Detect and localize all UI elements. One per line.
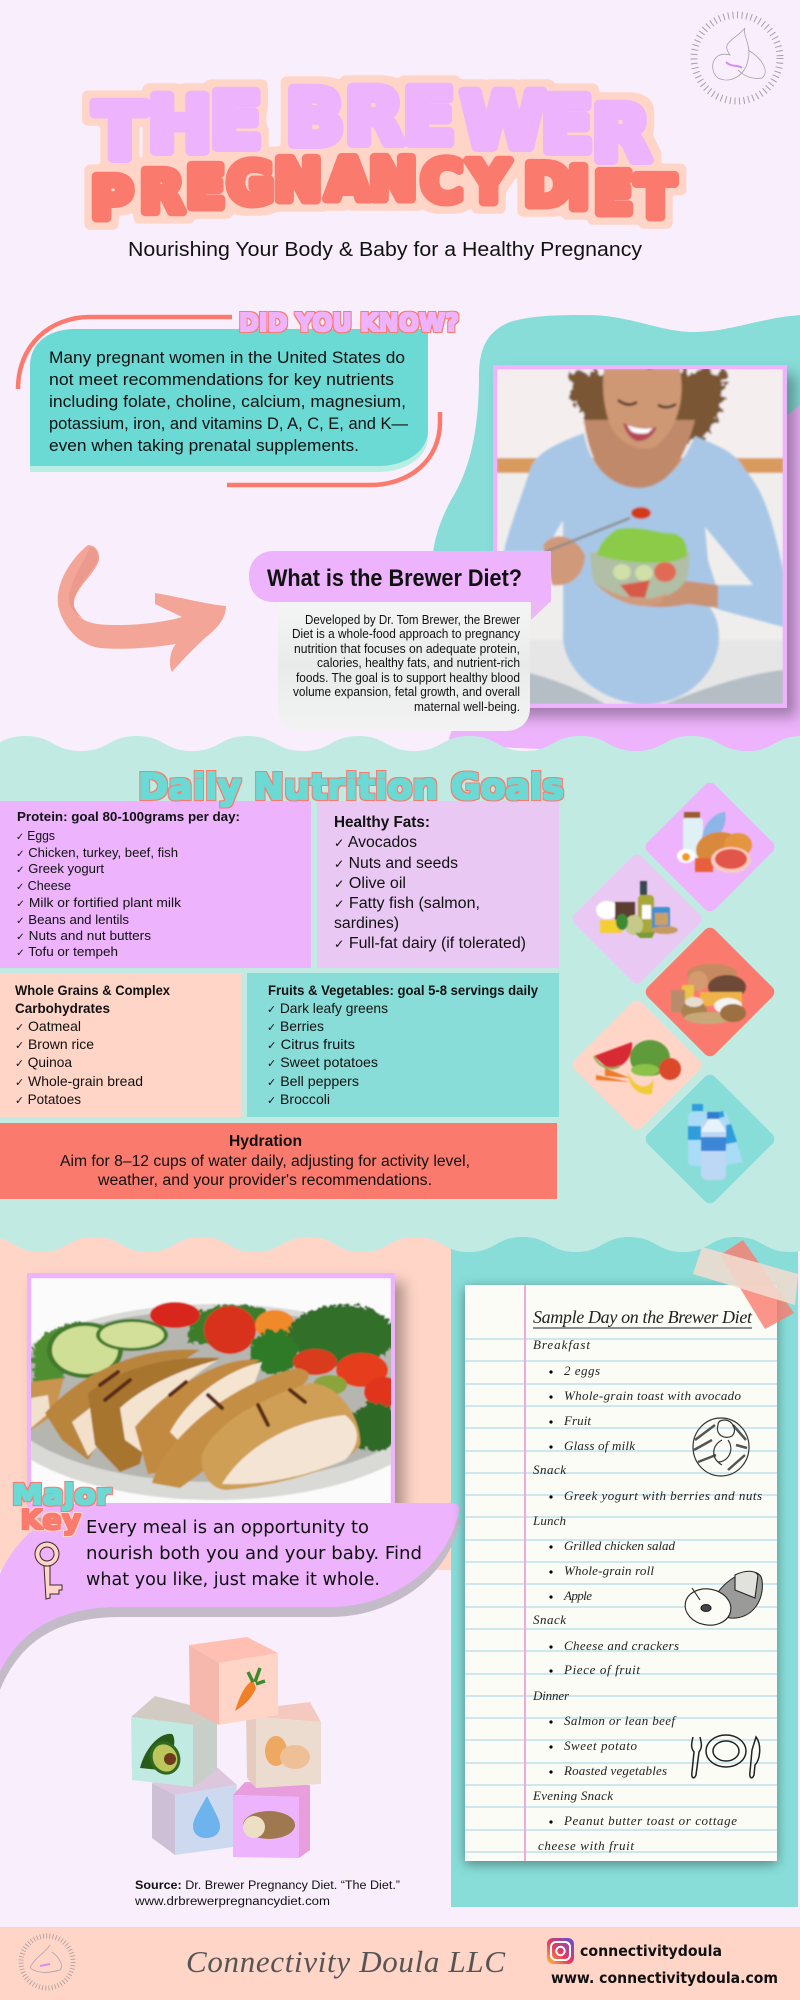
mint section background	[0, 736, 800, 1245]
description text	[292, 613, 521, 714]
band shadow	[0, 1513, 460, 1690]
major label: Major	[12, 1478, 111, 1511]
block: water	[152, 1768, 237, 1855]
panel: protein: ✓ Cheese	[16, 878, 71, 893]
panel: healthy fats: Healthy Fats:	[334, 814, 430, 831]
heading pill	[249, 551, 551, 602]
meal list: Apple	[563, 1588, 592, 1603]
panel: healthy fats: ✓ Avocados	[334, 834, 417, 851]
panel: what is the brewer diet	[249, 551, 551, 731]
panel: fruits and vegetables: Fruits & Vegetables: goal 5-8 servings daily	[268, 982, 538, 998]
meal list: Whole-grain toast with avocado	[564, 1388, 742, 1403]
did you know heading: DID YOU KNOW?	[239, 308, 459, 337]
fact text: even when taking prenatal supplements.	[49, 436, 359, 455]
footer	[0, 1927, 800, 2000]
meal list: Glass of milk	[564, 1438, 635, 1453]
meal list: Piece of fruit	[563, 1662, 640, 1677]
callout text: what you like, just make it whole.	[86, 1569, 380, 1590]
panel: whole grains: ✓ Brown rice	[15, 1036, 94, 1052]
meal list: Roasted vegetables	[563, 1763, 667, 1778]
website: www. connectivitydoula.com	[551, 1969, 778, 1987]
teal lower section	[451, 1237, 798, 1907]
source note: www.drbrewerpregnancydiet.com	[134, 1896, 330, 1908]
panel: protein: Protein: goal 80-100grams per day:	[17, 809, 240, 824]
panel: protein: ✓ Milk or fortified plant milk	[16, 895, 182, 910]
mint scalloped edge	[0, 1230, 800, 1252]
description text: Diet is a whole-food approach to pregnancy	[292, 627, 521, 641]
panel: healthy fats: ✓ Full-fat dairy (if tolerated)	[334, 935, 526, 952]
icon: plate and cutlery	[692, 1735, 760, 1778]
panel: protein: ✓ Nuts and nut butters	[16, 928, 152, 943]
teal background blob	[432, 315, 800, 640]
title: DIET	[524, 153, 675, 231]
band	[0, 1503, 459, 1672]
panel: fruits and vegetables: ✓ Berries	[267, 1018, 324, 1034]
heading text: What is the Brewer Diet?	[267, 565, 522, 592]
panel: fruits and vegetables	[247, 973, 559, 1117]
panel: did you know	[18, 308, 459, 485]
panel: hydration	[0, 1123, 557, 1199]
panel: fruits and vegetables: ✓ Bell peppers	[267, 1073, 359, 1089]
callout text: nourish both you and your baby. Find	[86, 1543, 422, 1564]
panel: whole grains: Carbohydrates	[15, 1000, 110, 1016]
description text: Developed by Dr. Tom Brewer, the Brewer	[305, 613, 520, 627]
panel: whole grains: Whole Grains & Complex	[15, 982, 170, 998]
meal list: Snack	[533, 1462, 566, 1477]
notebook: sample day	[465, 1240, 798, 1861]
icon: apple sketch	[682, 1571, 762, 1629]
fact text: potassium, iron, and vitamins D, A, C, E, and K—	[49, 414, 408, 433]
panel: healthy fats: ✓ Fatty fish (salmon,	[334, 895, 480, 912]
meal list: Peanut butter toast or cottage	[563, 1813, 737, 1828]
panel: fruits and vegetables: ✓ Citrus fruits	[267, 1036, 355, 1052]
fact text: including folate, choline, calcium, magnesium,	[49, 392, 406, 411]
description card	[278, 600, 530, 731]
source note: Source: Dr. Brewer Pregnancy Diet. “The Diet.”	[135, 1880, 400, 1892]
callout band: major key	[0, 1478, 460, 1690]
meal list: Snack	[533, 1612, 566, 1627]
meal list: Breakfast	[533, 1337, 590, 1352]
panel: fruits and vegetables: ✓ Dark leafy greens	[267, 1000, 388, 1016]
panel: protein: ✓ Tofu or tempeh	[16, 944, 118, 959]
panel: hydration: Aim for 8–12 cups of water daily, adjusting for activity level,	[60, 1153, 470, 1170]
diamond: healthy fats foods	[570, 852, 704, 986]
panel: whole grains: ✓ Quinoa	[15, 1054, 72, 1070]
key label: Key	[20, 1503, 81, 1536]
meal list: cheese with fruit	[538, 1838, 634, 1853]
coral bracket bottom	[227, 412, 440, 485]
meal list: Sweet potato	[564, 1738, 638, 1753]
description text: maternal well-being.	[414, 700, 520, 714]
description text: foods. The goal is to support healthy blood	[296, 671, 520, 685]
meal list: Cheese and crackers	[564, 1638, 679, 1653]
fact text: not meet recommendations for key nutrients	[49, 370, 394, 389]
title: PREGNANCY	[91, 147, 510, 232]
title: BREWER	[286, 72, 651, 178]
teal box shadow	[30, 335, 428, 472]
description text: nutrition that focuses on adequate protein,	[294, 642, 520, 656]
panel: protein: ✓ Eggs	[16, 828, 55, 843]
icon: instagram	[547, 1938, 574, 1964]
food blocks illustration	[131, 1637, 321, 1858]
diamond: water bottles	[643, 1072, 777, 1206]
meal list: Salmon or lean beef	[564, 1713, 677, 1728]
block: avocado	[131, 1696, 217, 1787]
icon: fetus sketch	[693, 1418, 749, 1476]
teal box	[30, 329, 428, 466]
icon: key	[35, 1542, 62, 1599]
paper	[465, 1285, 777, 1861]
fact text: Many pregnant women in the United States do	[49, 348, 405, 367]
panel: whole grains: ✓ Oatmeal	[15, 1018, 81, 1034]
footer logo	[21, 1936, 73, 1988]
notebook title: Sample Day on the Brewer Diet	[533, 1307, 753, 1327]
title: THE	[94, 76, 262, 176]
panel: healthy fats: sardines)	[334, 915, 399, 932]
panel: whole grains: ✓ Potatoes	[15, 1091, 81, 1107]
panel: protein: ✓ Greek yogurt	[16, 861, 104, 876]
diamond: fruits and vegetables	[570, 998, 704, 1132]
panel: whole grains: ✓ Whole-grain bread	[15, 1073, 143, 1089]
purple background blob	[447, 405, 800, 760]
meal list: Dinner	[532, 1688, 570, 1703]
meal list: 2 eggs	[564, 1363, 600, 1378]
arrow	[58, 545, 226, 672]
subtitle: Nourishing Your Body & Baby for a Healthy Pregnancy	[128, 238, 643, 261]
description text: volume expansion, fetal growth, and overall	[293, 685, 520, 699]
panel: protein	[0, 801, 311, 968]
panel: whole grains	[0, 973, 241, 1117]
peach lower section	[0, 1237, 451, 1570]
panel: hydration: Hydration	[229, 1133, 302, 1150]
panel: hydration: weather, and your provider's recommendations.	[97, 1172, 432, 1189]
block: bread	[233, 1782, 310, 1858]
meal list: Grilled chicken salad	[564, 1538, 676, 1553]
meal list: Evening Snack	[532, 1788, 613, 1803]
diamond: protein foods	[643, 780, 777, 914]
title	[91, 72, 675, 232]
heading: daily nutrition goals: Daily Nutrition Goals	[138, 767, 564, 808]
tape	[693, 1240, 798, 1329]
photo: pregnant woman eating salad	[493, 365, 787, 708]
panel: protein: ✓ Beans and lentils	[16, 912, 130, 927]
meal list: Whole-grain roll	[564, 1563, 654, 1578]
meal list: Greek yogurt with berries and nuts	[564, 1488, 762, 1503]
fact text	[49, 348, 408, 455]
instagram handle: connectivitydoula	[580, 1942, 722, 1960]
panel: fruits and vegetables: ✓ Broccoli	[267, 1091, 330, 1107]
meal list: Fruit	[563, 1413, 591, 1428]
logo: doula emblem	[694, 15, 780, 101]
panel: healthy fats: ✓ Olive oil	[334, 875, 406, 892]
diamond: whole grains foods	[643, 925, 777, 1059]
panel: healthy fats: ✓ Nuts and seeds	[334, 855, 458, 872]
source note	[134, 1880, 400, 1908]
brand name: Connectivity Doula LLC	[186, 1944, 505, 1979]
block: carrot	[189, 1637, 278, 1725]
photo: grilled chicken salad plate	[0, 1273, 443, 1518]
coral bracket top	[18, 317, 232, 389]
block: eggs	[246, 1702, 321, 1788]
callout text	[86, 1517, 422, 1590]
panel: fruits and vegetables: ✓ Sweet potatoes	[267, 1054, 378, 1070]
callout text: Every meal is an opportunity to	[86, 1517, 369, 1538]
meal list	[532, 1337, 762, 1853]
meal list: Lunch	[532, 1513, 566, 1528]
panel: healthy fats	[317, 801, 559, 968]
panel: protein: ✓ Chicken, turkey, beef, fish	[16, 845, 178, 860]
description text: calories, healthy fats, and nutrient-rich	[317, 656, 520, 670]
